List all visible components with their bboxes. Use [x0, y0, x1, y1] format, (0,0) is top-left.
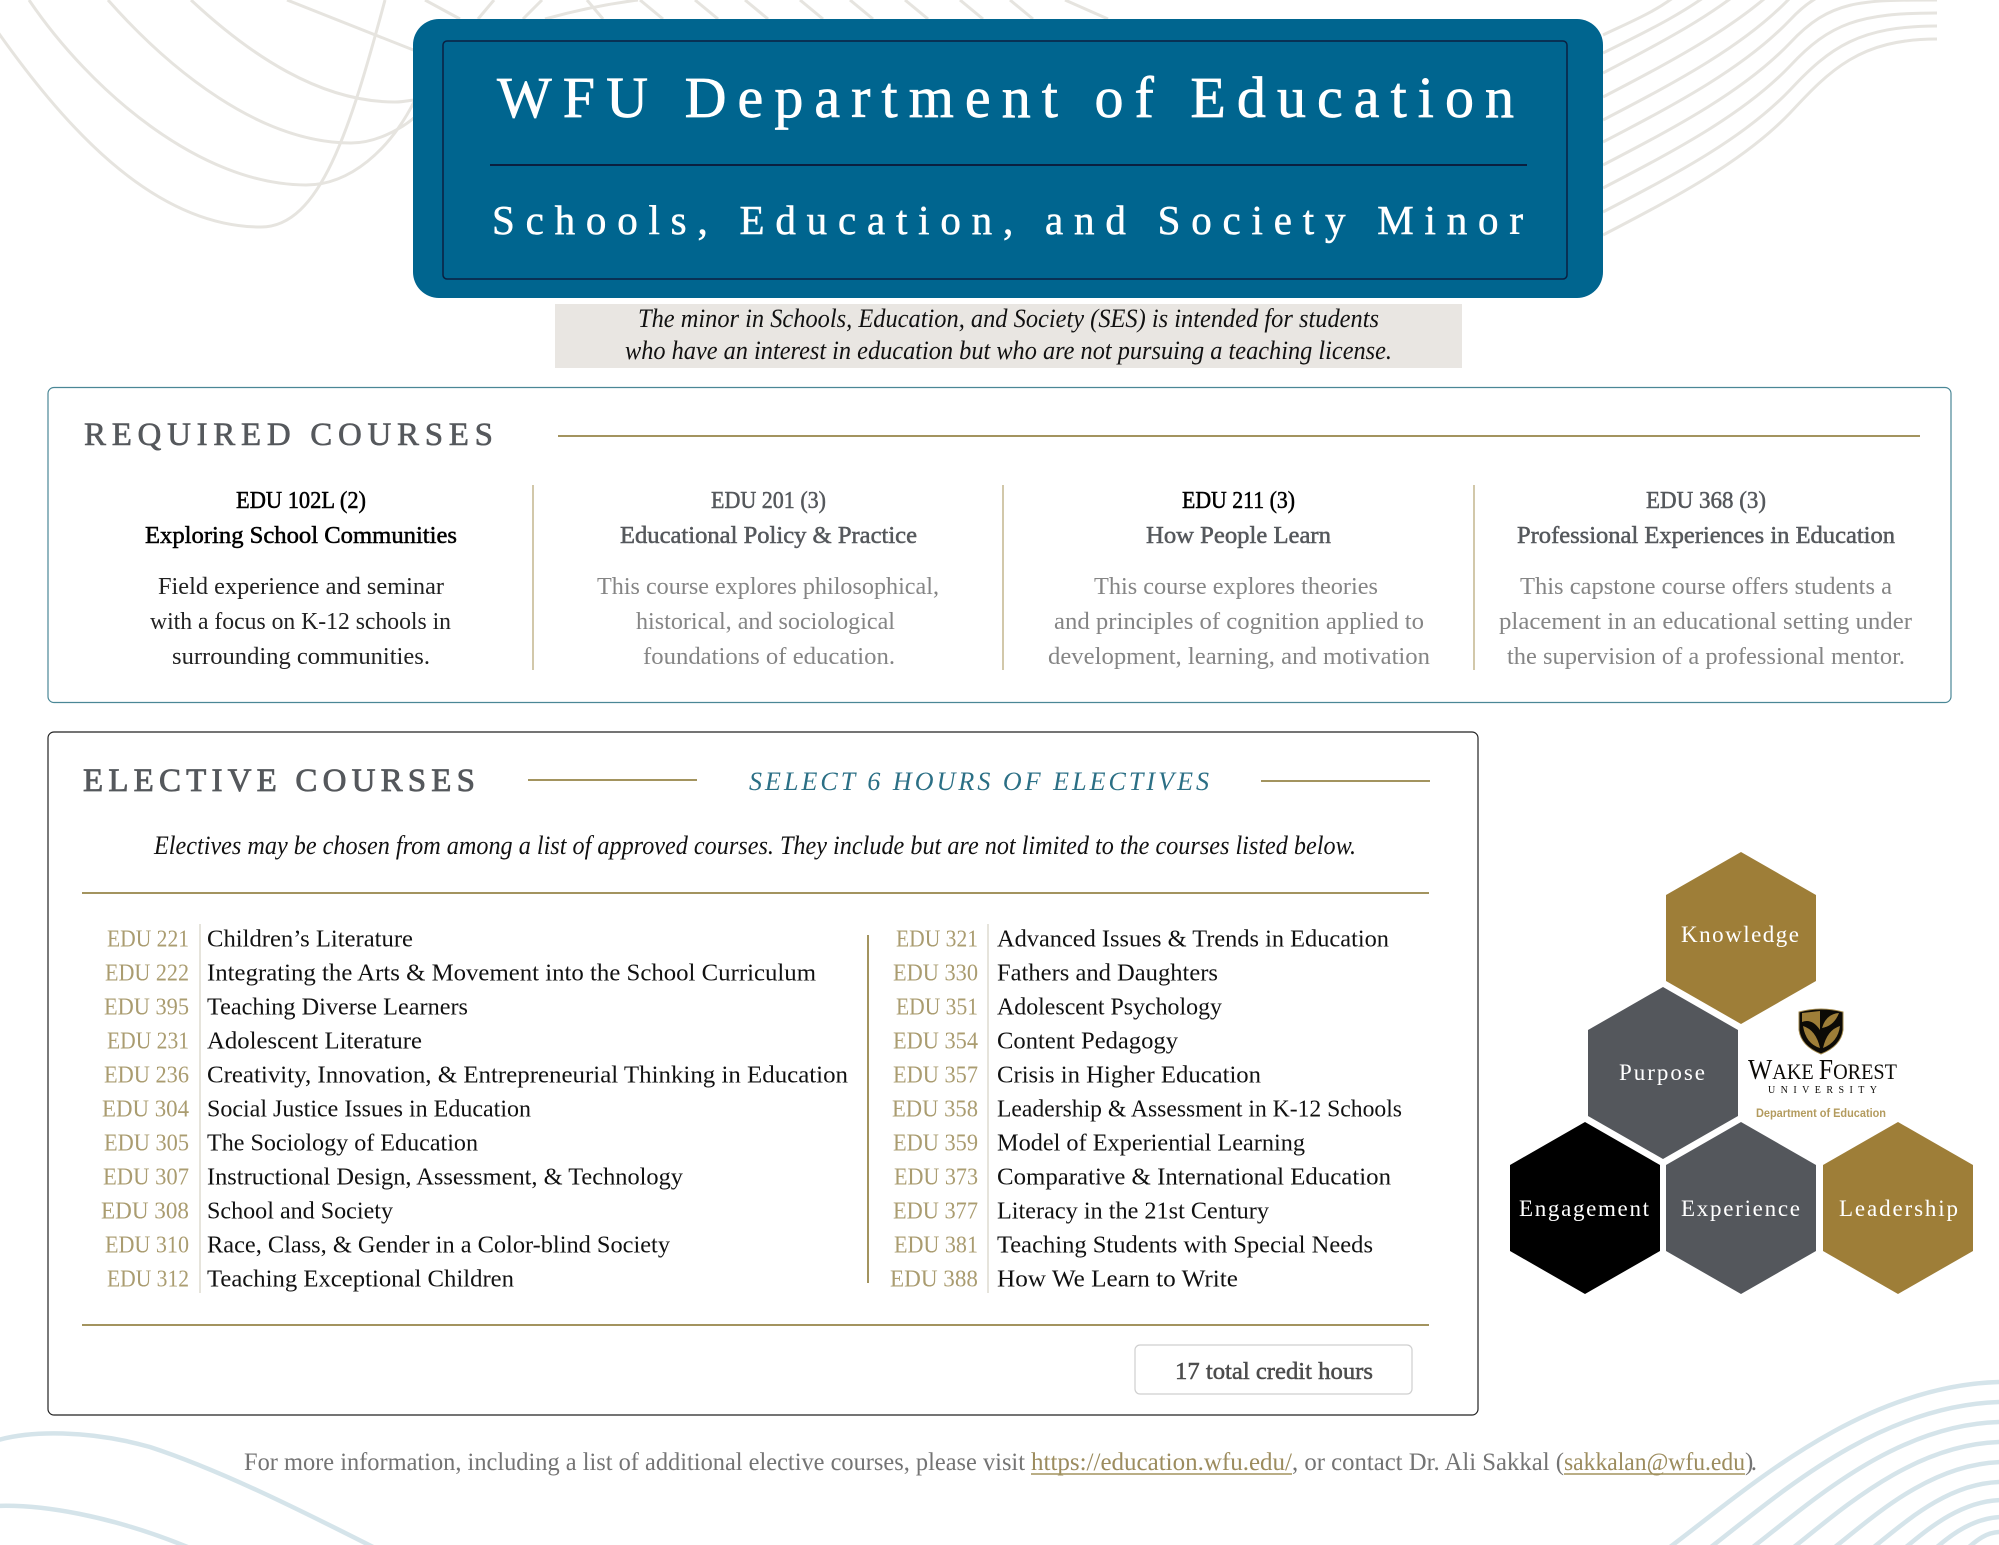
- main title: WFU Department of Education: [497, 65, 1514, 130]
- course list: right column: EDU 377: [893, 1198, 978, 1224]
- icon: shield: [1799, 1009, 1843, 1054]
- hexagon: leadership: [1823, 1122, 1973, 1294]
- course list: right column: How We Learn to Write: [997, 1266, 1238, 1292]
- course list: right column: EDU 321: [896, 926, 978, 952]
- course list: left column: EDU 395: [104, 994, 189, 1020]
- course: EDU 201: [597, 488, 939, 670]
- department label: Department of Education: [1756, 1106, 1886, 1120]
- course list: right column: Literacy in the 21st Century: [997, 1198, 1269, 1224]
- course list: right column: Leadership & Assessment in K-12 Schools: [997, 1096, 1402, 1122]
- course: EDU 368: This capstone course offers students a: [1520, 574, 1892, 600]
- course: EDU 368: Professional Experiences in Education: [1517, 523, 1895, 549]
- panel: required courses: [48, 388, 1951, 702]
- course list: left column: EDU 304: [102, 1096, 189, 1122]
- course list: left column: Race, Class, & Gender in a Color-blind Society: [207, 1232, 670, 1258]
- hexagon: purpose: [1588, 987, 1738, 1159]
- hexagon: experience: Experience: [1681, 1196, 1800, 1221]
- course list: left column: Children’s Literature: [207, 926, 413, 952]
- hexagon: engagement: [1510, 1122, 1660, 1294]
- course: EDU 102L: Field experience and seminar: [158, 574, 444, 600]
- course: EDU 201: foundations of education.: [643, 644, 895, 670]
- course list: right column: EDU 357: [893, 1062, 978, 1088]
- Wake Forest University logo: [1748, 1009, 1898, 1120]
- course: EDU 102L: EDU 102L (2): [236, 488, 366, 514]
- course: EDU 201: This course explores philosophical,: [597, 574, 939, 600]
- course: EDU 102L: [145, 488, 457, 670]
- course: EDU 211: development, learning, and motivation: [1048, 644, 1430, 670]
- course list: right column: Teaching Students with Special Needs: [997, 1232, 1373, 1258]
- footer contact line: , or contact Dr. Ali Sakkal (: [1292, 1449, 1564, 1476]
- course list: right column: Fathers and Daughters: [997, 960, 1218, 986]
- course: EDU 102L: with a focus on K-12 schools in: [150, 609, 451, 635]
- course: EDU 211: and principles of cognition applied to: [1054, 609, 1424, 635]
- footer contact line: For more information, including a list of additional elective courses, please visit: [244, 1449, 1025, 1476]
- course: EDU 368: [1499, 488, 1912, 670]
- course list: right column: Advanced Issues & Trends in Education: [997, 926, 1389, 952]
- course: EDU 211: This course explores theories: [1094, 574, 1378, 600]
- intro callout: [555, 304, 1462, 368]
- footer contact line: [244, 1449, 1757, 1476]
- course list: right column: EDU 330: [893, 960, 978, 986]
- title banner: [413, 19, 1603, 298]
- course list: right column: Content Pedagogy: [997, 1028, 1178, 1054]
- link: website: https://education.wfu.edu/: [1031, 1449, 1292, 1476]
- course: EDU 102L: surrounding communities.: [172, 644, 430, 670]
- course list: right column: Model of Experiential Learning: [997, 1130, 1305, 1156]
- wordmark: WAKE FOREST: [1748, 1055, 1898, 1086]
- callout: select 6 hours: SELECT 6 HOURS OF ELECTIVES: [749, 767, 1209, 796]
- course list: left column: EDU 222: [105, 960, 189, 986]
- footer contact line: ).: [1745, 1449, 1757, 1476]
- course list: left column: EDU 236: [104, 1062, 189, 1088]
- course list: right column: EDU 373: [894, 1164, 978, 1190]
- course list: right column: EDU 354: [893, 1028, 978, 1054]
- course: EDU 102L: Exploring School Communities: [145, 523, 457, 549]
- course: EDU 211: How People Learn: [1146, 523, 1331, 549]
- course list: right column: EDU 388: [890, 1266, 978, 1292]
- university label: UNIVERSITY: [1768, 1085, 1877, 1096]
- course list: left column: Adolescent Literature: [207, 1028, 422, 1054]
- course list: left column: EDU 305: [104, 1130, 189, 1156]
- hexagon cluster: [1510, 852, 1973, 1294]
- course list: left column: School and Society: [207, 1198, 393, 1224]
- course list: right column: EDU 358: [892, 1096, 978, 1122]
- hexagon: knowledge: Knowledge: [1681, 922, 1799, 947]
- subtitle: Schools, Education, and Society Minor: [492, 197, 1523, 243]
- course list: left column: Teaching Diverse Learners: [207, 994, 468, 1020]
- course list: left column: Social Justice Issues in Education: [207, 1096, 531, 1122]
- intro callout: The minor in Schools, Education, and Society (SES) is intended for students: [638, 304, 1379, 333]
- course: EDU 368: the supervision of a professional mentor.: [1507, 644, 1905, 670]
- course list: right column: EDU 351: [896, 994, 978, 1020]
- course list: left column: EDU 310: [105, 1232, 189, 1258]
- course list: left column: EDU 221: [107, 926, 189, 952]
- course list: right column: Adolescent Psychology: [997, 994, 1222, 1020]
- electives note: Electives may be chosen from among a list of approved courses. They include but are not limited to the courses listed below.: [153, 831, 1356, 860]
- intro callout: who have an interest in education but who are not pursuing a teaching license.: [625, 336, 1392, 365]
- course: EDU 211: [1048, 488, 1430, 670]
- course: EDU 201: historical, and sociological: [636, 609, 895, 635]
- hexagon: engagement: Engagement: [1519, 1196, 1650, 1221]
- course list: left column: EDU 308: [101, 1198, 189, 1224]
- panel: elective courses: [48, 732, 1478, 1415]
- course list: right column: Crisis in Higher Education: [997, 1062, 1261, 1088]
- total credit hours badge: 17 total credit hours: [1175, 1359, 1373, 1385]
- course: EDU 211: EDU 211 (3): [1182, 488, 1295, 514]
- course list: right column: EDU 381: [894, 1232, 978, 1258]
- course list: right column: EDU 359: [893, 1130, 978, 1156]
- course list: left column: EDU 312: [107, 1266, 189, 1292]
- course list: left column: The Sociology of Education: [207, 1130, 478, 1156]
- heading: required courses: REQUIRED COURSES: [84, 417, 493, 453]
- course list: left column: EDU 231: [107, 1028, 189, 1054]
- heading: elective courses: ELECTIVE COURSES: [83, 763, 475, 799]
- course: EDU 201: Educational Policy & Practice: [620, 523, 917, 549]
- course list: left column: Teaching Exceptional Children: [207, 1266, 514, 1292]
- course: EDU 368: placement in an educational setting under: [1499, 609, 1912, 635]
- hexagon: experience: [1666, 1122, 1816, 1294]
- hexagon: knowledge: [1666, 852, 1816, 1024]
- course list: left column: EDU 307: [103, 1164, 189, 1190]
- total credit hours badge: [1135, 1345, 1412, 1394]
- course: EDU 368: EDU 368 (3): [1646, 488, 1766, 514]
- hexagon: leadership: Leadership: [1839, 1196, 1958, 1221]
- hexagon: purpose: Purpose: [1619, 1060, 1705, 1085]
- course list: left column: [101, 926, 848, 1292]
- course: EDU 201: EDU 201 (3): [711, 488, 826, 514]
- course list: left column: Instructional Design, Assessment, & Technology: [207, 1164, 683, 1190]
- course list: right column: [890, 926, 1402, 1292]
- course list: right column: Comparative & International Education: [997, 1164, 1391, 1190]
- course list: left column: Creativity, Innovation, & Entrepreneurial Thinking in Education: [207, 1062, 848, 1088]
- link: email: sakkalan@wfu.edu: [1564, 1449, 1745, 1476]
- course list: left column: Integrating the Arts & Movement into the School Curriculum: [207, 960, 816, 986]
